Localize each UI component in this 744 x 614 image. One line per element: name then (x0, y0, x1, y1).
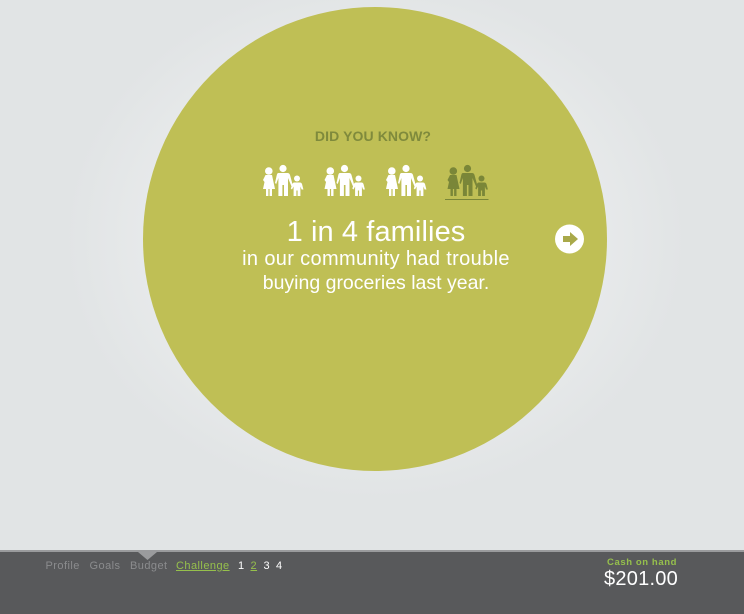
nav: budget: Budget (130, 560, 168, 572)
icon: next arrow button (555, 224, 584, 254)
heading: did you know: DID YOU KNOW? (315, 128, 431, 144)
text block: description: in our community had trouble (242, 248, 510, 270)
nav: challenge: Challenge (176, 560, 230, 572)
text block: description: buying groceries last year. (263, 272, 489, 294)
nav: step 1: 1 (238, 560, 245, 572)
nav: goals: Goals (90, 560, 120, 572)
footer bar (0, 550, 744, 614)
nav: step 4: 4 (276, 560, 283, 572)
nav: profile: Profile (46, 560, 80, 572)
text block: description (242, 248, 510, 294)
label: cash on hand: Cash on hand (607, 557, 677, 568)
icon: family 3 (386, 165, 426, 196)
icon: family 4 highlighted (445, 165, 488, 200)
icon row: four families (263, 164, 488, 200)
nav: step 3: 3 (264, 560, 270, 572)
nav: step 2: 2 (250, 560, 257, 572)
icon: family 2 (324, 165, 365, 196)
icon: nav pointer (138, 552, 157, 560)
value: cash amount: $201.00 (604, 568, 678, 590)
icon: family 1 (263, 165, 303, 196)
headline: 1 in 4 families: 1 in 4 families (287, 216, 465, 248)
